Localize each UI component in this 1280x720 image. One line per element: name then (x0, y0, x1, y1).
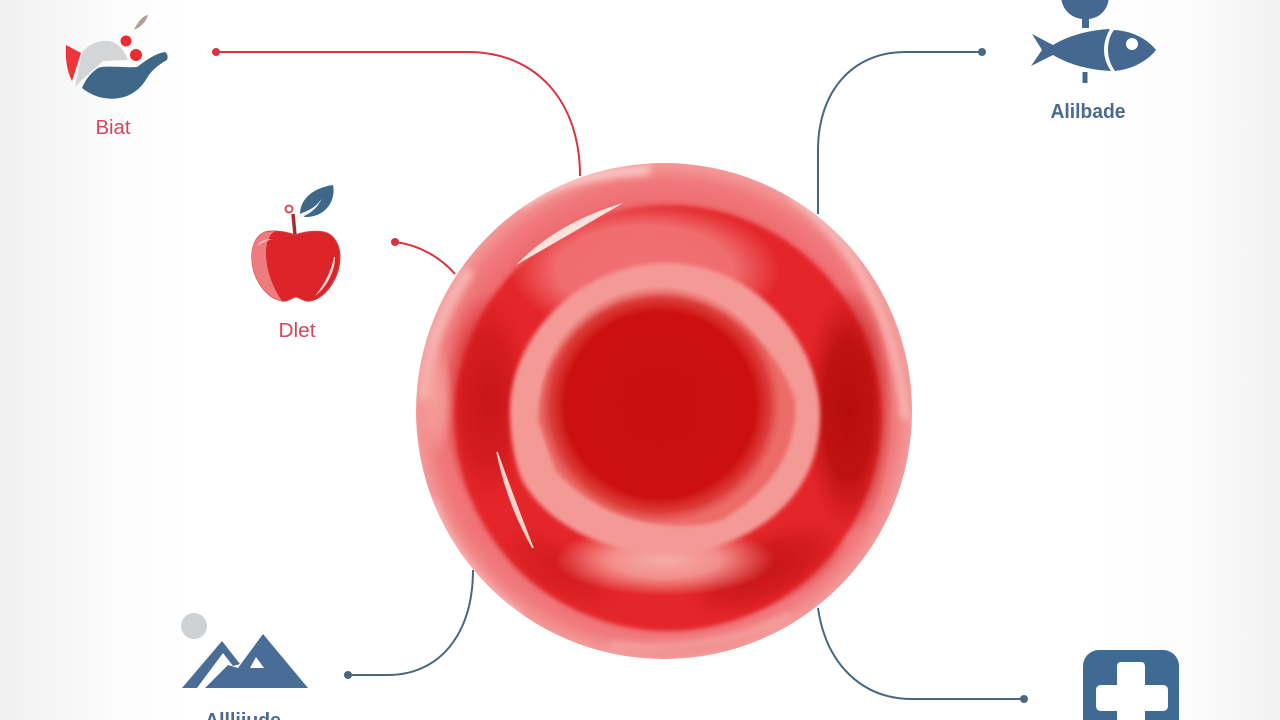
label: Dlet: Dlet (278, 320, 316, 342)
label: Alilbade: Alilbade (1050, 101, 1126, 123)
cell rim highlights (425, 170, 905, 646)
pale upper band (516, 206, 774, 313)
pale lower band (559, 538, 771, 594)
label: Biat: Biat (96, 117, 131, 139)
icon: apple (252, 185, 340, 301)
specular highlight left (497, 452, 533, 548)
pale left rim patch (423, 355, 453, 450)
icon: medical cross (1083, 650, 1179, 720)
icon: food bowl (66, 15, 168, 99)
dark ring shadows (447, 290, 892, 608)
connector: bottom-right blue line (818, 608, 1028, 703)
inner soft ring (538, 298, 795, 526)
pale ring (510, 263, 820, 554)
connector: apple red line (391, 238, 455, 274)
icon: fish and plant (1031, 0, 1156, 83)
connector: top-left red line (212, 48, 580, 176)
red blood cell (416, 163, 912, 659)
connector: bottom-left blue line (344, 570, 473, 679)
dark red ring (455, 205, 881, 631)
connector: top-right blue line (818, 48, 986, 214)
specular highlight top (516, 203, 623, 265)
icon: mountains and sun (181, 613, 308, 688)
nucleus (538, 286, 782, 524)
